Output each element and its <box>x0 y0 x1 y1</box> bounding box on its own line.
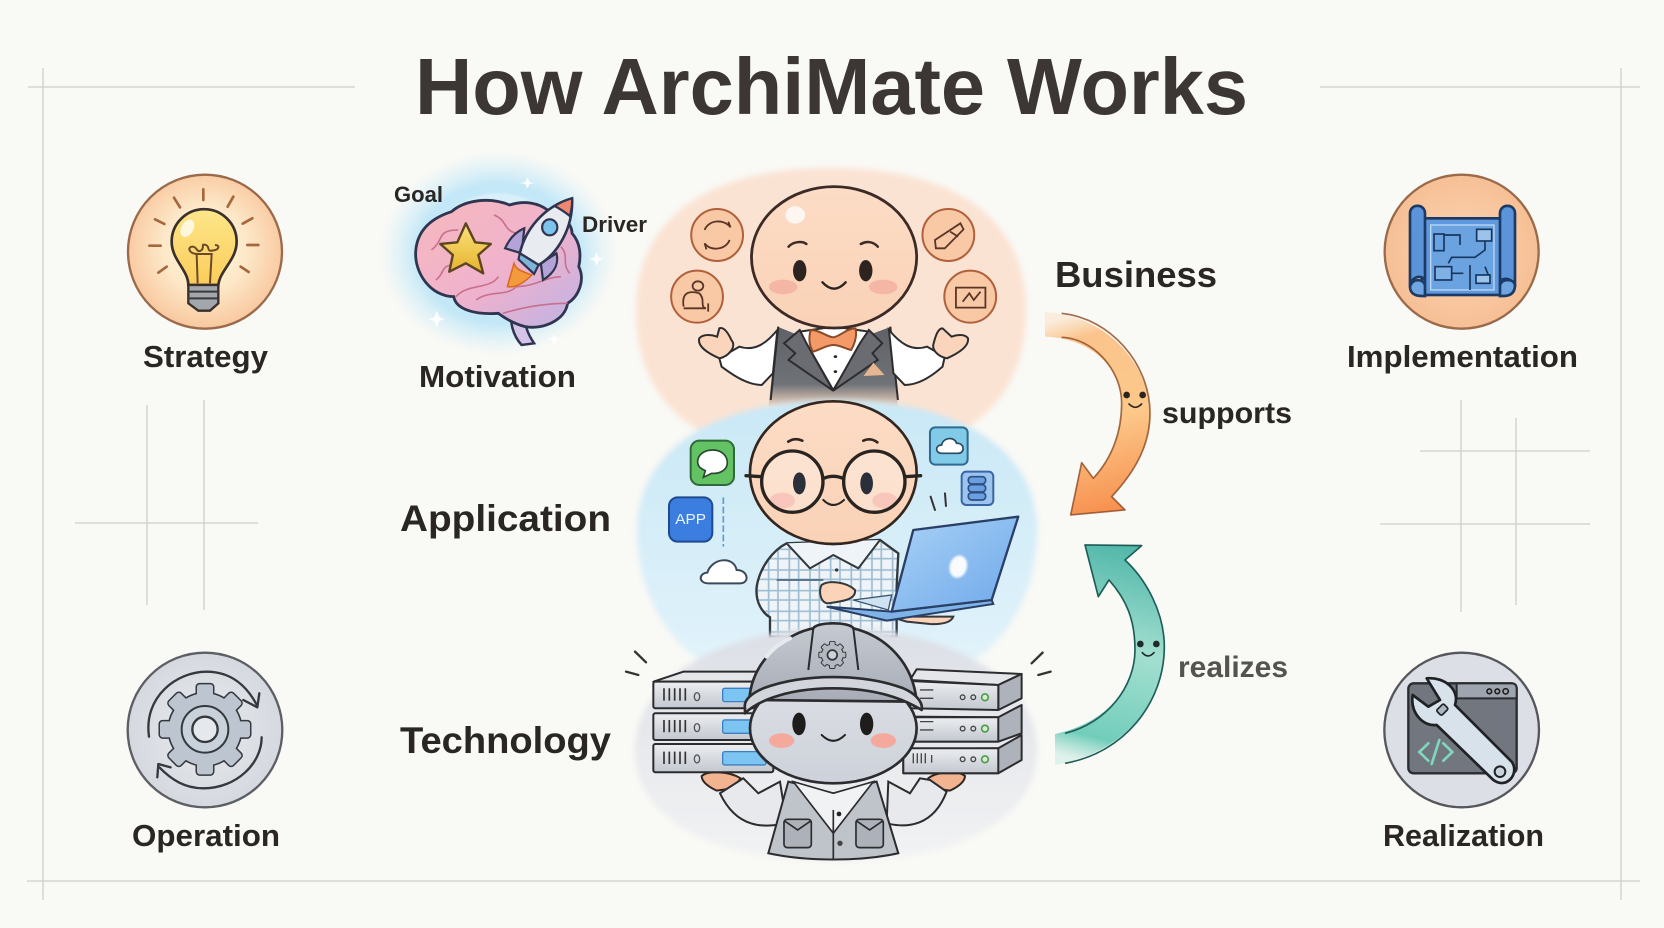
right server stack <box>903 669 1022 773</box>
grey backdrop <box>635 628 1037 862</box>
panel: technology layer <box>400 623 1051 862</box>
label: Implementation: Implementation <box>1347 339 1578 374</box>
label: Goal: Goal <box>394 182 443 207</box>
arrow body: orange <box>1045 312 1150 515</box>
character: developer with laptop <box>669 401 1018 637</box>
icon: gear with cycle arrows <box>128 653 282 807</box>
label: supports: supports <box>1162 397 1292 430</box>
panel: application layer <box>400 400 1037 668</box>
label: Technology: Technology <box>400 720 611 761</box>
title: How ArchiMate Works <box>415 42 1248 131</box>
panel: operation <box>128 653 282 853</box>
label: realizes: realizes <box>1178 651 1288 684</box>
character: engineer holding servers <box>626 623 1051 860</box>
panel: strategy <box>128 175 282 374</box>
blue backdrop <box>637 400 1037 668</box>
label: Operation: Operation <box>132 818 280 853</box>
panel: implementation <box>1347 175 1578 374</box>
icon: light bulb <box>128 175 282 329</box>
icon: wrench over code window <box>1384 653 1539 807</box>
label: Strategy: Strategy <box>143 339 269 374</box>
label: Application: Application <box>400 498 611 539</box>
label: Motivation: Motivation <box>419 359 576 394</box>
left server stack <box>653 672 773 772</box>
arrow: supports <box>1045 312 1292 515</box>
label: Business: Business <box>1055 254 1217 295</box>
character: business manager <box>671 187 996 407</box>
panel: business layer <box>636 168 1217 432</box>
arrow: realizes <box>1055 545 1288 765</box>
label: Realization: Realization <box>1383 818 1544 853</box>
peach backdrop <box>636 168 1026 432</box>
panel: motivation <box>380 152 647 394</box>
label: Driver: Driver <box>582 212 647 237</box>
character: developer with laptop: APP <box>675 512 706 528</box>
panel: realization <box>1383 653 1544 853</box>
arrow body: teal <box>1055 545 1164 765</box>
icon: brain with star and rocket <box>380 152 617 355</box>
icon: blueprint <box>1385 175 1539 329</box>
